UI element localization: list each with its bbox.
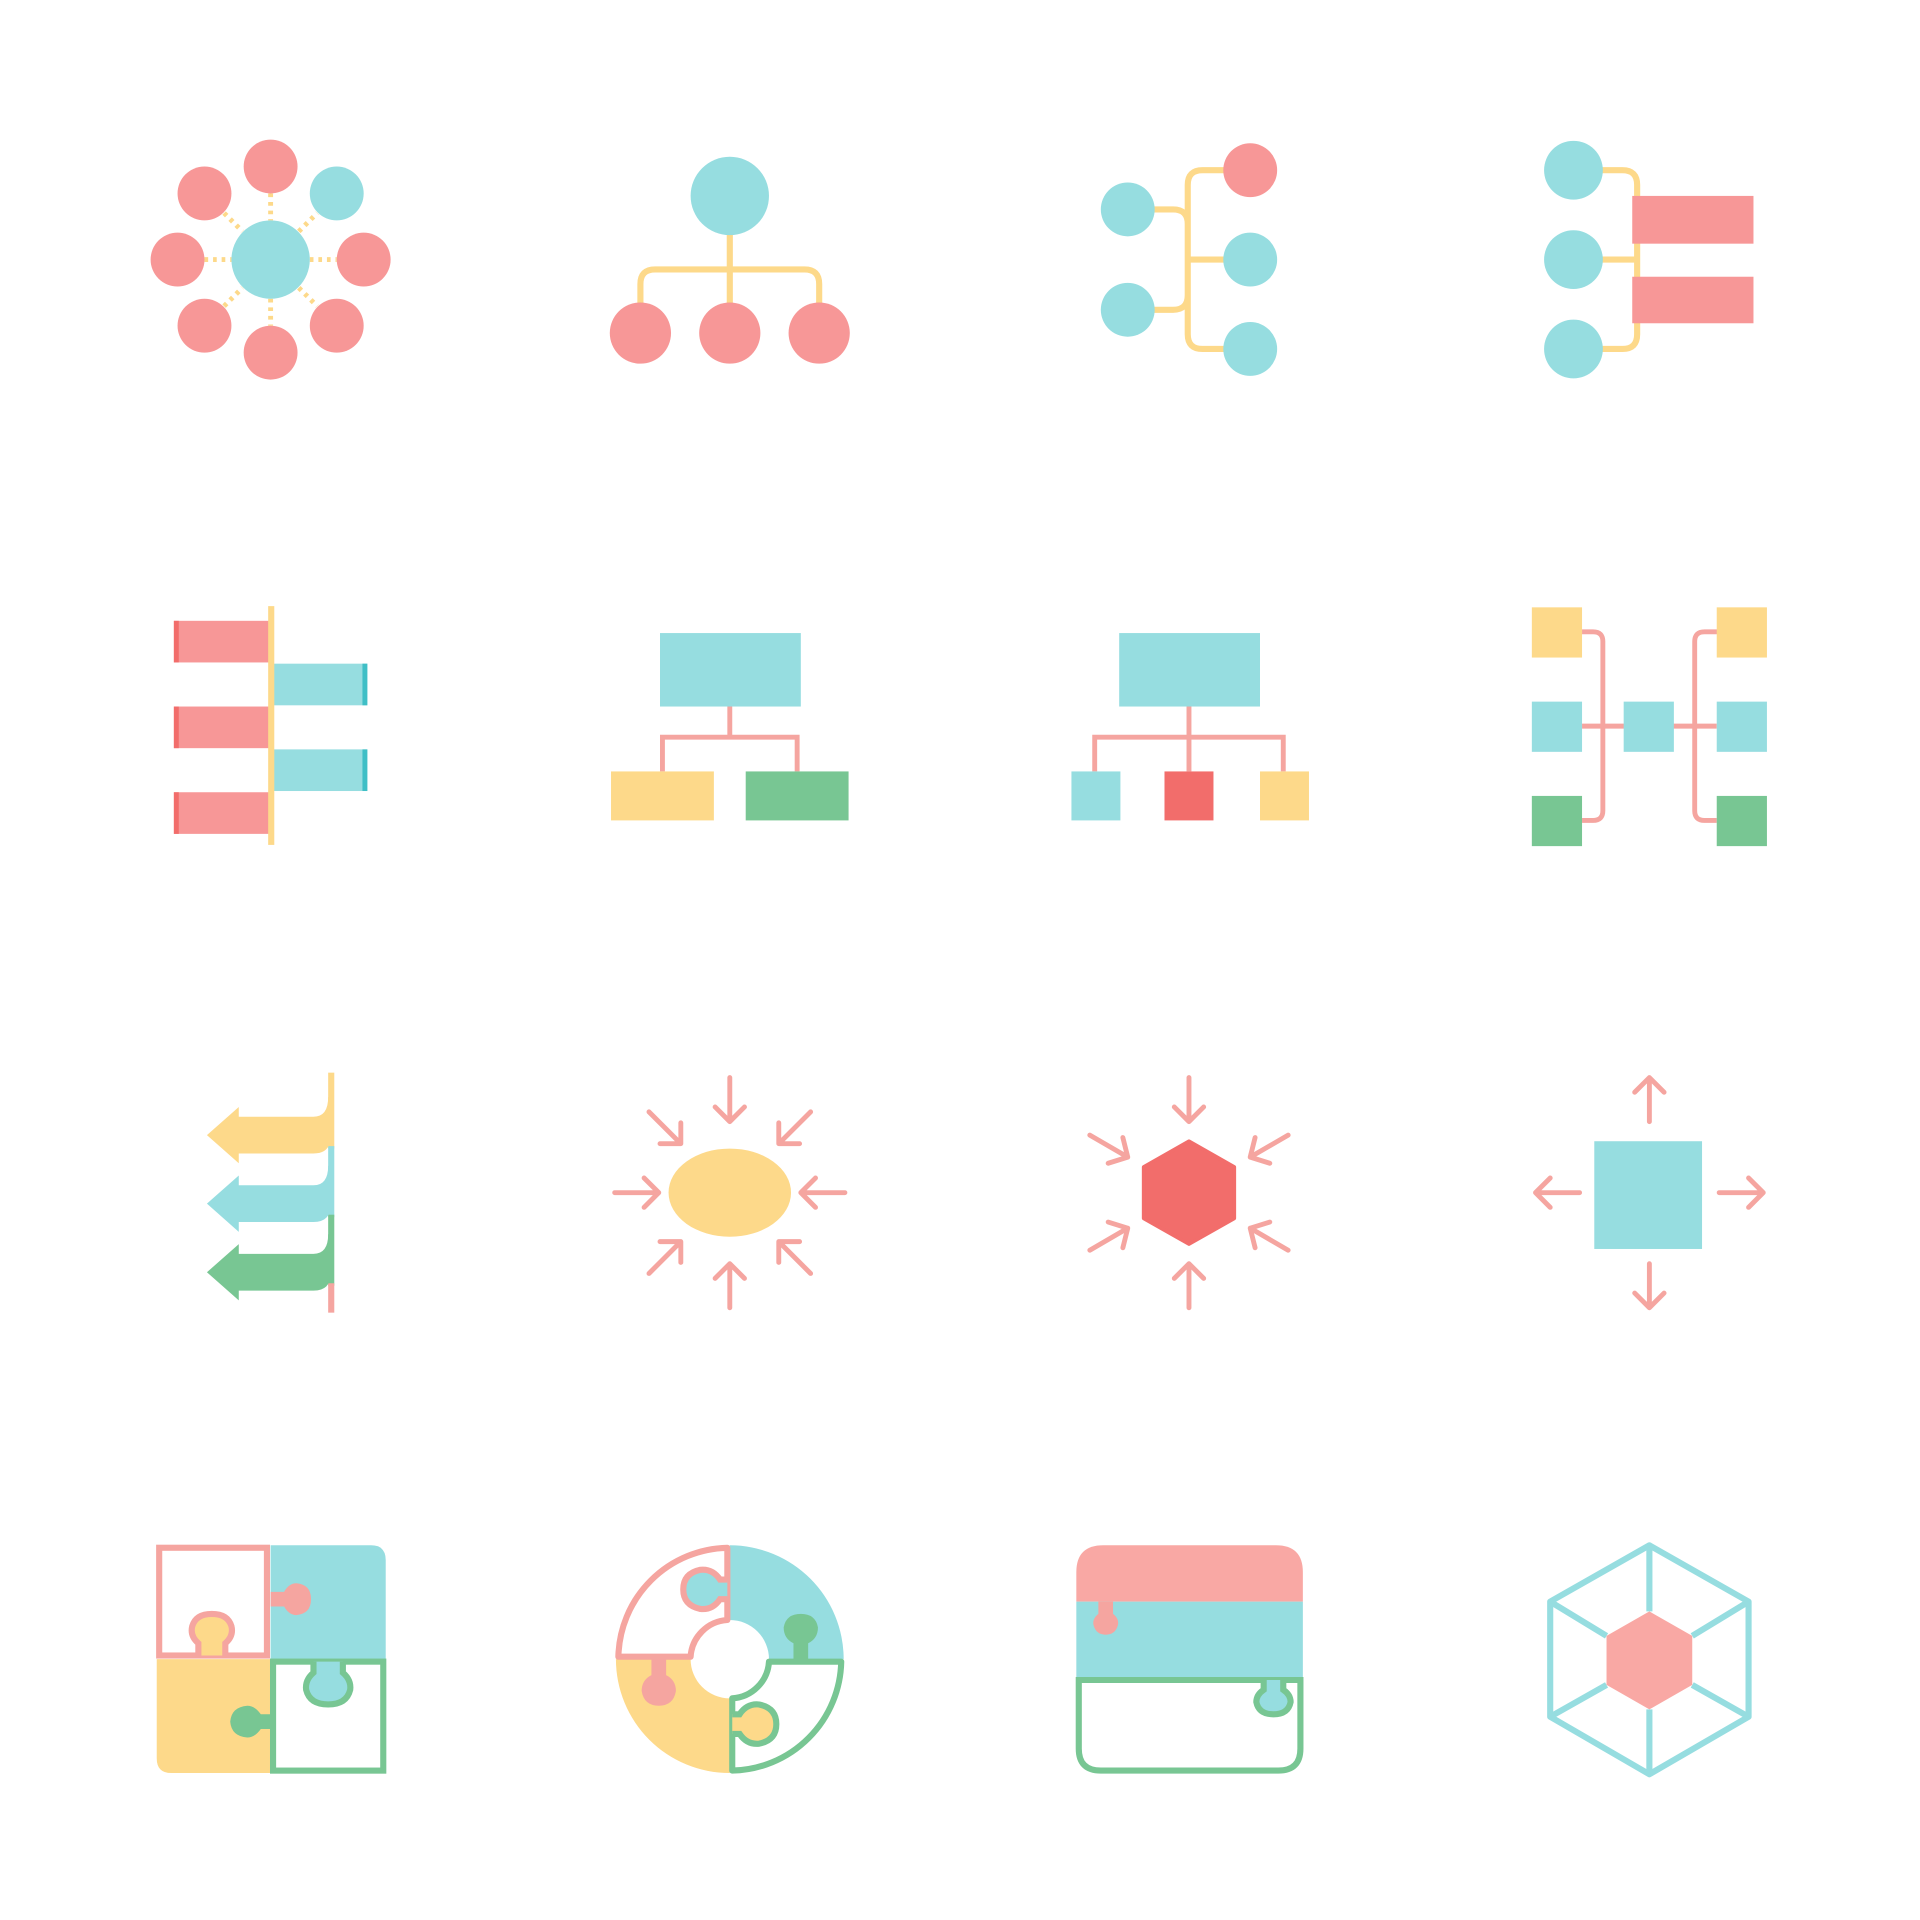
icon: circle tree bbox=[610, 157, 850, 364]
icon: circle branch bbox=[1101, 143, 1277, 376]
icon: mirrored square network bbox=[1532, 607, 1767, 846]
icon: circles to bars bbox=[1544, 141, 1753, 378]
icon: radial hub bbox=[151, 140, 391, 380]
icon: alternating bars bbox=[174, 606, 367, 845]
icon: converge hexagon bbox=[1090, 1078, 1288, 1308]
icon: nested hexagon bbox=[1550, 1545, 1749, 1774]
icon: layered puzzle block bbox=[1076, 1545, 1303, 1771]
icon: converge ellipse bbox=[615, 1078, 845, 1308]
icon: two-box org chart bbox=[611, 633, 849, 820]
icon: square puzzle bbox=[157, 1545, 386, 1773]
icon: ring puzzle bbox=[616, 1545, 844, 1773]
icon: expand square bbox=[1536, 1078, 1763, 1308]
icon: three-box org chart bbox=[1071, 633, 1309, 820]
icon: left arrows bbox=[207, 1073, 334, 1313]
